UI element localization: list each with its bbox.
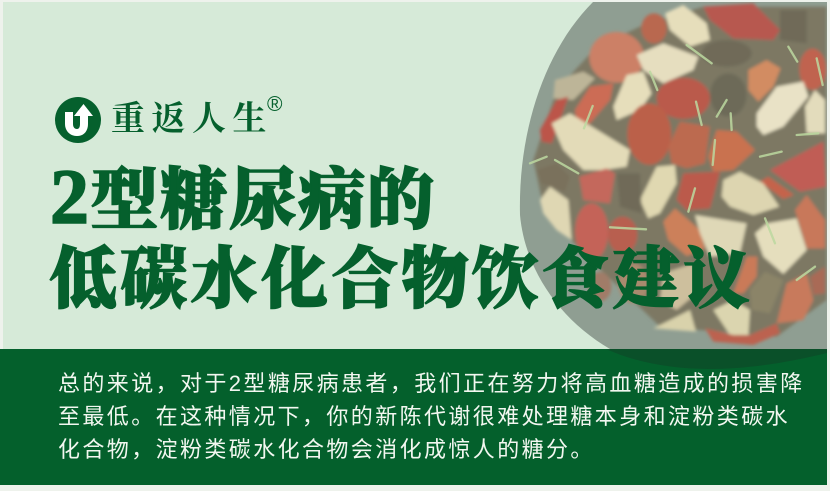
banner: summary background xyxy=(0,349,827,485)
food photo: stir-fry plate xyxy=(520,2,827,369)
summary line 1: 总的来说，对于2型糖尿病患者，我们正在努力将高血糖造成的损害降 xyxy=(58,371,805,396)
summary line 2: 至最低。在这种情况下，你的新陈代谢很难处理糖本身和淀粉类碳水 xyxy=(58,404,790,429)
title line 2: 低碳水化合物饮食建议 xyxy=(50,243,753,317)
summary line 3: 化合物，淀粉类碳水化合物会消化成惊人的糖分。 xyxy=(58,437,595,462)
title line 1: 2型糖尿病的 xyxy=(50,153,436,240)
summary text xyxy=(58,371,805,462)
logo wordmark: 重返人生 xyxy=(111,101,273,138)
logo icon: U with up arrow xyxy=(55,97,101,143)
background panel xyxy=(3,2,827,350)
registered mark: ® xyxy=(267,93,282,116)
